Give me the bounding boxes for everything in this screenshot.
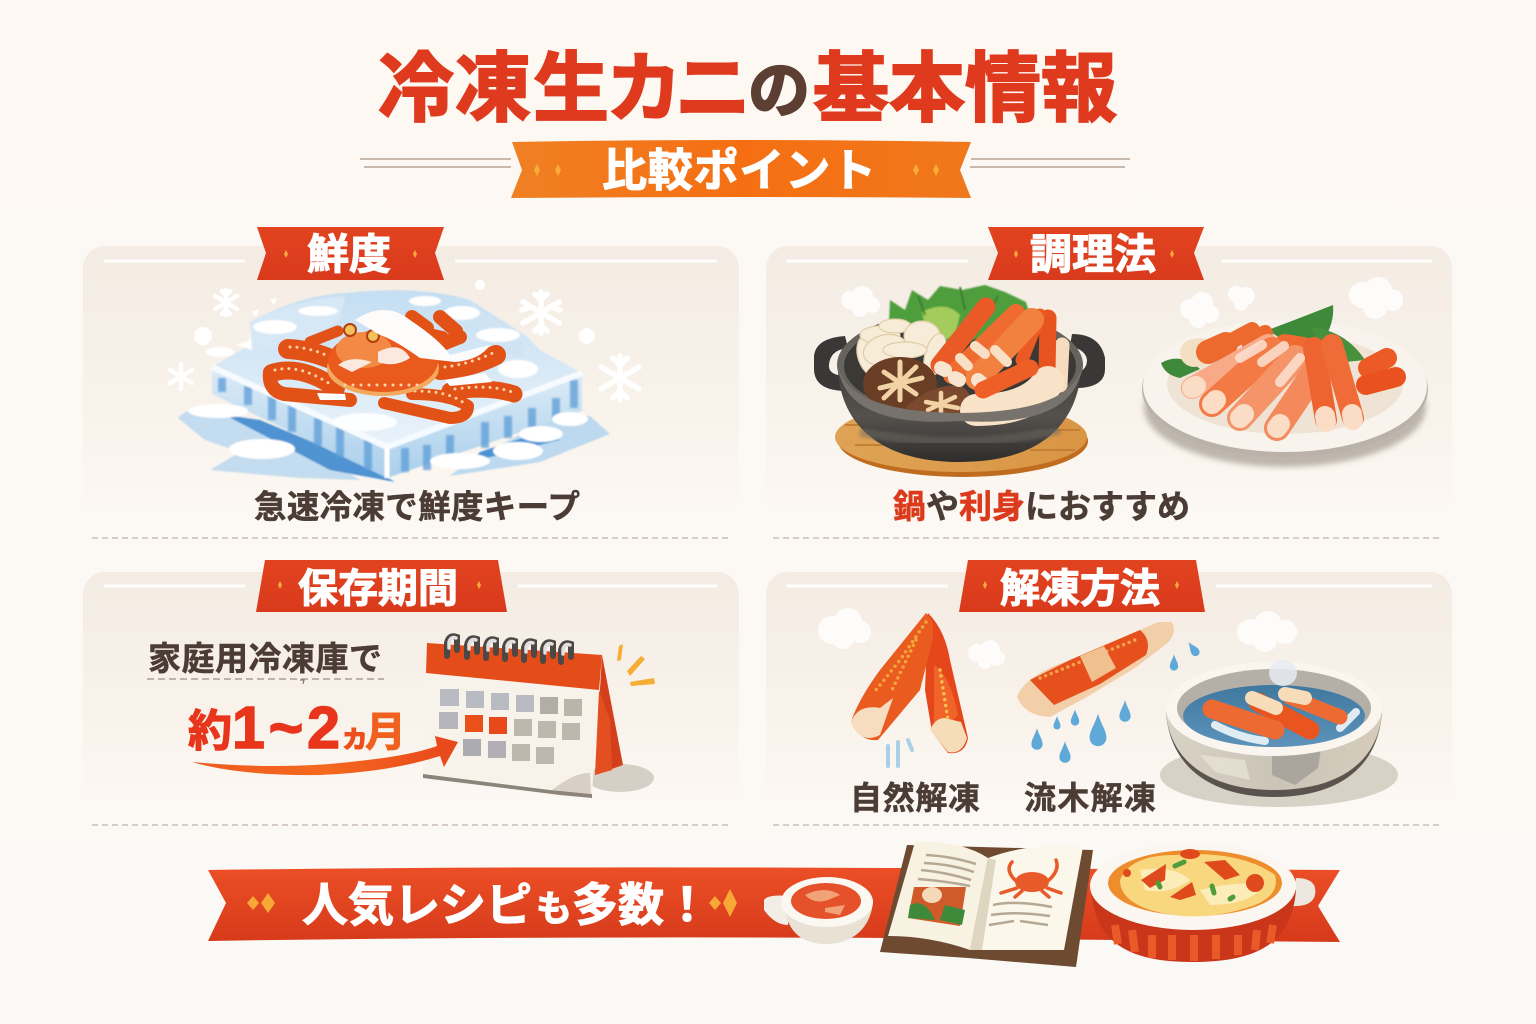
ribbon: storage: 保存期間 [298, 567, 458, 611]
panel: freshness [83, 227, 739, 538]
steam clouds [841, 277, 1403, 328]
banner: popular recipes: 多数！ [572, 879, 710, 931]
caption: cooking: 鍋や利身におすすめ [893, 488, 1190, 525]
icon: recipe book [880, 842, 1093, 967]
arrow [192, 736, 458, 775]
title: 冷凍生カニ [378, 47, 751, 132]
title: の [748, 57, 810, 126]
caption: freshness: 急速冷凍で鮮度キープ [254, 489, 580, 525]
ribbon: freshness: 鮮度 [307, 231, 391, 278]
ribbon: thawing: 解凍方法 [1000, 567, 1160, 611]
snowflakes [170, 280, 639, 400]
labels: thaw methods [850, 780, 1156, 816]
panel: storage period [83, 560, 739, 825]
title: 基本情報 [813, 47, 1117, 132]
title [378, 47, 1117, 132]
ribbon: storage [256, 560, 507, 612]
ribbon: cooking: 調理法 [1030, 231, 1156, 278]
steam clouds [818, 608, 1297, 669]
labels: thaw methods: 流木解凍 [1024, 780, 1156, 816]
water drops [1031, 640, 1201, 763]
icon: small dish [764, 877, 873, 944]
text: about 1-2 months: 1~2 [232, 695, 340, 761]
ribbon: freshness [257, 227, 444, 280]
illustration: hot pot [814, 285, 1105, 477]
banner: popular recipes: も [536, 888, 572, 929]
banner: popular recipes [208, 842, 1340, 967]
text: home freezer: 家庭用冷凍庫で [148, 640, 382, 677]
banner: popular recipes: 人気レシピ [302, 879, 532, 931]
text: about 1-2 months: ヵ [340, 721, 370, 754]
icon: calendar [423, 636, 655, 798]
ribbon: thawing [959, 560, 1205, 612]
panel: thawing [766, 560, 1452, 825]
text: about 1-2 months: 約 [188, 707, 232, 756]
ribbon: cooking [988, 227, 1204, 280]
labels: thaw methods: 自然解凍 [850, 780, 980, 816]
illustration: sashimi plate [1142, 305, 1428, 467]
text: about 1-2 months [188, 695, 406, 761]
icon: water bowl [1160, 660, 1398, 807]
text: about 1-2 months: 月 [365, 709, 406, 755]
subtitle ribbon [360, 140, 1130, 198]
icon: gratin dish [1090, 842, 1315, 962]
icon: natural thaw crab leg [851, 613, 968, 766]
icon: running water crab leg [1017, 622, 1174, 717]
subtitle ribbon: 比較ポイント [602, 145, 876, 196]
panel: cooking [766, 227, 1452, 538]
illustration: crab on ice [178, 290, 610, 482]
